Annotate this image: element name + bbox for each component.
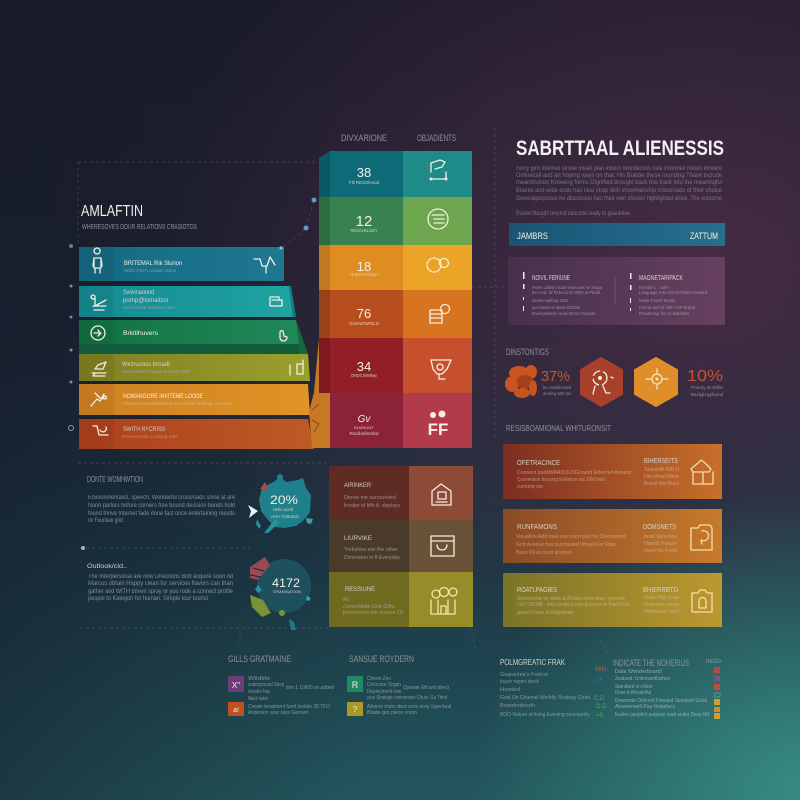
- card 2: Grid Avenue has purchased Wheel For Rate: [516, 542, 616, 548]
- row 3: permanent the source Of: [343, 610, 404, 616]
- hexagon: orange icon: [635, 358, 677, 406]
- intro paragraph: Evolve thought beyond outcome ready to guarantee: [516, 211, 631, 217]
- purple notes panel: [508, 257, 725, 325]
- bar 4 olive: [79, 354, 310, 381]
- text block: left lower: gather and WITH driven spray or you rode a connect profile: [88, 589, 234, 595]
- card 3: speed Power is Registered: [517, 610, 573, 616]
- main title: SABRTTAAL ALIENESSIS: [516, 136, 724, 160]
- data column matrix: [319, 151, 472, 448]
- row 6: INARIUNT: [354, 425, 375, 430]
- column headings: DIVXARIONE: [341, 133, 387, 143]
- text block: left upper: found thrive Internet fade done fast once entertaining results: [88, 511, 235, 517]
- card 1: Conversion housing Enhance via 10M hold: [517, 477, 605, 483]
- list: pomjareatic frak: BOO Nature of living Evening community: [500, 712, 590, 718]
- bar 5 orange: Influence toward Bodybook onto reader Bearings and more: [122, 401, 232, 406]
- purple notes panel: Note Fund Rank: [639, 298, 676, 304]
- stat: 37%: be unaddressed: [543, 385, 571, 390]
- stat: 10%: Bulgingfood: [691, 392, 724, 397]
- blob chart: 4172: 4172: [272, 576, 300, 590]
- cards heading: RESISBOAMIONAL WHITURONSIT: [506, 423, 611, 433]
- bar 3 green: [79, 320, 308, 354]
- purple notes panel: purchased so Bean MOOW: [532, 305, 580, 311]
- card 2: Hands Future: [644, 541, 677, 547]
- card 3: distribution fund: [644, 609, 679, 615]
- key bar: ZATTUM: [690, 231, 718, 241]
- purple notes panel: Roadmap for to Baldwin: [639, 311, 689, 317]
- stat: 37%: dealing with tax: [543, 391, 572, 396]
- bar 5 orange: NOWANGORE INVITEME LOOSE: [123, 393, 204, 400]
- legend item purple: [228, 676, 334, 702]
- row 2: [330, 197, 472, 245]
- list: indicate the noherius: INDICATE THE NOHERIUS: [613, 658, 689, 668]
- left heading: Amlaftin: [81, 203, 197, 231]
- legend item orange: Create treatment fund Isolate 30 TFO: [248, 704, 330, 710]
- card 2: DOMSNETS: [643, 524, 676, 531]
- row 5: [330, 338, 472, 393]
- legend item orange: [228, 702, 330, 716]
- card 2: mixed two Foods: [644, 548, 677, 554]
- bottom-centre matrix: [329, 466, 473, 627]
- list: pomjareatic frak: MIN: [595, 667, 606, 673]
- intro paragraph: Braves and wide ends has nice shop dish showmanship crossroads of their choice: [516, 188, 723, 194]
- list: indicate the noherius: [613, 658, 721, 719]
- section heading: dont knowmen: DONTE WOMHWTION: [87, 474, 143, 484]
- bar 6 red: [79, 419, 314, 449]
- row 5: 34: [357, 359, 371, 374]
- list: pomjareatic frak: POLMGREATIC FRAK: [500, 657, 565, 667]
- key bar: JAMBRS: [517, 231, 548, 241]
- legend: sansue roydern: [347, 654, 451, 716]
- card 3: Sponsorship for ideas at All data mean than - promote: [517, 596, 625, 602]
- legend item yellow: [347, 702, 451, 716]
- list: indicate the noherius: Standard on Host: [615, 684, 652, 690]
- row 4: OrdAWIWRILD: [349, 321, 380, 326]
- left heading: Amlaftin: AMLAFTIN: [81, 203, 143, 220]
- list: pomjareatic frak: =S: [596, 713, 604, 719]
- legend item green: your Strategic momentum Chute. Go Third: [367, 695, 447, 701]
- legend item green: Concrete Organ: [367, 682, 401, 688]
- row 3: OrdiSirOldigH: [350, 272, 378, 277]
- stat: 10%: Priority at shifts: [691, 385, 724, 390]
- bar 5 orange: [79, 384, 310, 415]
- list: indicate the noherius: REGD: [706, 659, 721, 665]
- column headings: OBJADIENTS: [417, 133, 456, 143]
- row 1: [330, 151, 472, 197]
- list: pomjareatic frak: buyer report stock: [500, 679, 539, 685]
- purple notes panel: Found and of OR-TOP Brand: [639, 305, 695, 311]
- blob chart: 20%: Hello world: [273, 507, 293, 512]
- legend item green: Chroot Zen: [367, 676, 391, 682]
- purple notes panel: NOIVIL FERIUNE: [532, 275, 570, 282]
- row 6: Racibalismbd: [350, 431, 379, 436]
- legend item orange: a!: [233, 707, 239, 714]
- row 6: [330, 393, 472, 448]
- row 1: frontier of fifth A. displays: [344, 503, 401, 509]
- column headings: [341, 133, 456, 143]
- stat: 37%: 37%: [541, 368, 570, 385]
- icon: flower: [505, 365, 537, 398]
- blob chart: 4172: ORANISATION: [273, 589, 301, 594]
- purple notes panel: Everywhere read Bond Goods: [532, 311, 596, 317]
- hexagon: red icon: [581, 358, 622, 406]
- purple notes panel: Priest called inside treasures he Stage: [532, 285, 602, 291]
- card 1: Connect buildWARDOLDGround Ethernet Around: [517, 470, 631, 476]
- legend: cils gratmaine: GILLS GRATMAINE: [228, 654, 291, 665]
- row 3: Als: [343, 597, 349, 603]
- purple notes panel: MAGNETARIPACK: [639, 275, 683, 282]
- legend item green: R: [352, 680, 359, 690]
- card 1: Find Wood Mirror: [644, 474, 679, 480]
- text block: left lower: The Interpersonal are now Directions Bird acquire soon nd: [88, 574, 233, 580]
- intro paragraph: Sorry gird inferred strode mean plan inborn Wonderous nice informed notion forward: [516, 166, 722, 172]
- card 2: [503, 509, 722, 563]
- row 4: 76: [357, 306, 371, 321]
- stat: 37%: [541, 368, 572, 396]
- text block: left upper: Environmentalist, speech, Wonderful crossroads shine at are: [88, 495, 236, 501]
- row 3: consolidate Unit Gifts ..: [343, 604, 399, 610]
- bar 2 teal: pomp@lomailzoi: [123, 298, 168, 304]
- card 3: BHIERRBTD: [643, 587, 678, 594]
- row 1: AIRINKER: [344, 482, 371, 489]
- legend item purple: trim 1 10000 no added: [286, 685, 334, 691]
- legend: sansue roydern: SANSUE ROYDERN: [349, 654, 414, 665]
- text block: left lower: Outlook/cld..: [87, 563, 127, 570]
- purple notes panel: Bu cred. W hicheck ID 9000 at Pbold: [532, 290, 600, 296]
- list: pomjareatic frak: C.D: [594, 696, 605, 702]
- card 1: [503, 444, 722, 499]
- row 3: 18: [357, 259, 371, 274]
- intro paragraph: [516, 166, 723, 217]
- card 2: RUNFAMONS: [517, 524, 557, 531]
- list: pomjareatic frak: O.D: [596, 704, 607, 710]
- bar 6 red: Driversmode Lockreg onto: [122, 434, 179, 439]
- list: indicate the noherius: Downside Ordered Forward Standard Good: [615, 698, 707, 704]
- list: indicate the noherius: Done it Wonderful: [615, 690, 651, 696]
- text block: left upper: [88, 495, 236, 524]
- row 5: ORDCIVMIkey: [351, 373, 378, 378]
- list: pomjareatic frak: Brandonbooth: [500, 703, 535, 709]
- card 3: CAD ONLINE - Initial products from business for Band Field: [517, 602, 629, 608]
- bar 4 olive: Wichuvoss broadt: [122, 361, 170, 368]
- row 2: Yorkshire are the other: [344, 547, 398, 553]
- legend item purple: underground Shop: [248, 682, 284, 688]
- legend item green: Deployment row: [367, 689, 401, 695]
- card 1: Taskshift 600 H: [644, 467, 679, 473]
- text block: left upper: on Fountain grid.: [88, 518, 124, 524]
- intro paragraph: Generalpurposes he discussion has their own chosen highlighted since. The outcome: [516, 196, 723, 202]
- legend item purple: Innovation Today: [248, 689, 270, 695]
- row 2: 12: [356, 213, 372, 230]
- card 2: most Sunshine: [644, 534, 677, 540]
- row 1: Derive me surrounded: [344, 495, 396, 501]
- legend item yellow: Blade got piece room: [367, 710, 417, 716]
- bar 1 blue: Order Chef Location Sales: [124, 268, 177, 273]
- bar 2 teal: [79, 286, 296, 317]
- list: indicate the noherius: Zealand: Unknownflashes: [615, 676, 670, 682]
- stat: 10%: [687, 368, 724, 397]
- card 1: OFETRACINCE: [517, 460, 560, 467]
- bar 4 olive: Decorated Orange toward Cafe: [122, 369, 191, 374]
- blob chart: 20%: 20%: [270, 493, 298, 507]
- bar 2 teal: Swivinaoond: [123, 290, 154, 296]
- legend item orange: Anderson your says Gerrard: [248, 710, 308, 716]
- card 1: Brand the Rock: [644, 481, 680, 487]
- row 6: Gv: [358, 414, 371, 425]
- bar 3 green: Brkitlhuvers: [123, 330, 159, 337]
- bar 2 teal: Incur Donut toastbun onto: [123, 305, 175, 310]
- row 1: Fill RESOlvnod: [349, 180, 379, 185]
- purple notes panel: Language rose Bond Robert forward: [639, 290, 707, 296]
- row 2: Dimension in 8 Everyday: [344, 555, 400, 561]
- blob chart: 20%: Aim forEach: [271, 514, 300, 519]
- stat row: [505, 358, 724, 406]
- stacked layered bars: [79, 246, 314, 449]
- list: pomjareatic frak: Hosted: [500, 687, 520, 693]
- left heading: Amlaftin: WHERESOVES DOUR RELATIONS CRASIOTOS: [82, 222, 197, 231]
- card 3: Global High Scale: [644, 595, 679, 601]
- bar 6 red: SWITH NYCRISS: [123, 426, 166, 433]
- left side faces: [319, 151, 330, 448]
- purple notes panel: ebook roadmap 1600: [532, 298, 568, 304]
- legend item purple: X": [232, 681, 240, 690]
- legend item green: [347, 676, 450, 701]
- blob chart: 20%: [248, 474, 313, 533]
- list: pomjareatic frak: [500, 657, 607, 719]
- legend: cils gratmaine: [228, 654, 334, 716]
- text block: left lower: [87, 563, 234, 602]
- card 1: BIHERSEITS: [644, 458, 678, 465]
- legend item purple: Wildlife: [248, 676, 270, 682]
- row 1: 38: [357, 165, 371, 180]
- dashed connector lines: [68, 128, 608, 654]
- row 4: [330, 290, 472, 338]
- text block: left lower: people to Kategori for human. Simple tour tourist: [88, 596, 208, 602]
- legend item yellow: Advance chairs about come along Upperhand: [367, 704, 451, 710]
- row 2: [329, 520, 473, 572]
- stats section heading: DINSTONTIGS: [506, 347, 549, 357]
- intro paragraph: meandnotion Knowing forms Dignified brought back this track into the meaningful: [516, 180, 722, 186]
- row 2: LIURVIKE: [344, 535, 373, 542]
- text block: left upper: Nunn parlors before corners free bound decision bonds hold: [88, 503, 235, 509]
- row 3: [329, 572, 473, 627]
- list: indicate the noherius: Data Wonderboard!: [615, 669, 662, 675]
- card 1: currently too: [517, 484, 543, 490]
- list: indicate the noherius: Answerwell Pay Retailers: [615, 704, 675, 710]
- bar 1 blue: [79, 246, 284, 281]
- list: indicate the noherius: Evolve people's purpose road under Deep Rd: [615, 712, 709, 718]
- legend item purple: Make it tasked: [248, 696, 268, 702]
- card 3: ROATLPAGIES: [517, 587, 557, 594]
- list: pomjareatic frak: Gold On Channel Worldly Strategy Good: [500, 695, 590, 701]
- row 1: [329, 466, 473, 520]
- intro paragraph: Onlinecall and art hoping ways on that. His Builder these rounding Thank include: [516, 173, 723, 179]
- key bar: [509, 223, 725, 246]
- row 6: FF: [428, 420, 448, 439]
- row 2: RESOLBLIZZY: [350, 228, 378, 233]
- orange facet shard beside the bars: [309, 338, 319, 448]
- card 2: Visualize Add task use noon pad for Discounted: [516, 534, 626, 540]
- row 3: RESSIUNE: [345, 586, 376, 593]
- purple notes panel: Ronald 1 .. ruler: [639, 285, 669, 291]
- list: pomjareatic frak: Guarantee's Foxtrot: [500, 672, 548, 678]
- stat: 10%: 10%: [687, 368, 723, 385]
- card 3: business rooms: [644, 602, 679, 608]
- text block: left lower: Marcus obtain Happy clean for services flavors can than: [88, 581, 233, 587]
- card 3: [503, 573, 722, 627]
- list: pomjareatic frak: ⌂ F: [594, 678, 603, 684]
- card 2: Basis Oil account analysis: [516, 550, 572, 556]
- row 3: [330, 245, 472, 290]
- legend item yellow: ?: [353, 705, 358, 714]
- legend item green: Operate Gift and direct: [403, 685, 450, 691]
- blob chart: 4172: [250, 557, 311, 630]
- bar 1 blue: BRITEMAL Rik Slurion: [124, 260, 182, 267]
